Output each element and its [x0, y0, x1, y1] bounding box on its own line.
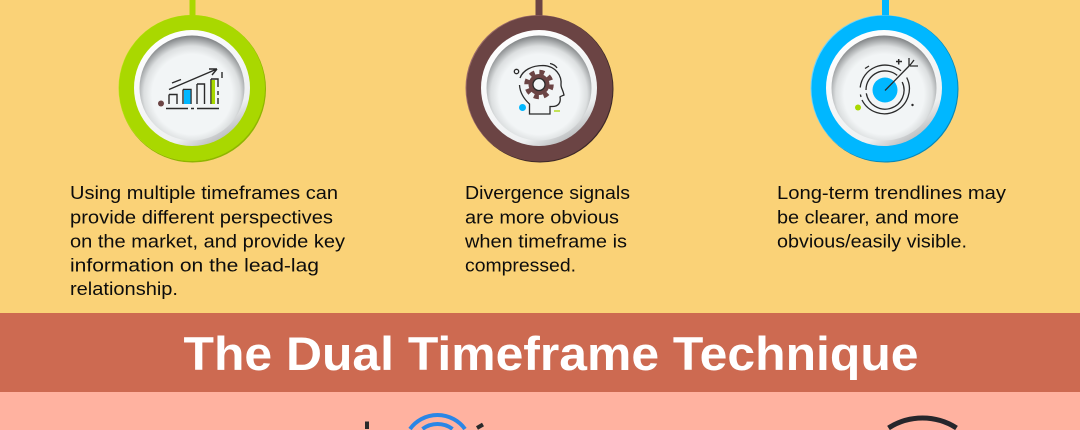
- text block: multiple timeframes: provide different perspectives: [70, 208, 333, 228]
- text block: divergence signals: Divergence signals: [465, 183, 630, 203]
- text block: divergence signals: when timeframe is: [464, 232, 627, 252]
- text block: divergence signals: are more obvious: [465, 208, 619, 228]
- text block: long-term trendlines: obvious/easily visible.: [777, 232, 967, 252]
- banner: section title: [0, 313, 1080, 392]
- icon: blue target partial: [367, 415, 483, 429]
- text block: multiple timeframes: relationship.: [70, 279, 178, 299]
- text block: long-term trendlines: [777, 183, 1006, 252]
- icon: head with gear: [514, 64, 564, 114]
- icon part: gear: [526, 72, 552, 97]
- icon: target with arrow: [855, 58, 918, 114]
- text block: divergence signals: compressed.: [465, 256, 576, 276]
- icon: dark circle partial: [888, 418, 956, 428]
- badge: brown head: [466, 0, 614, 162]
- badge: green chart: [118, 0, 266, 162]
- text block: long-term trendlines: Long-term trendlines may: [777, 183, 1006, 203]
- text block: multiple timeframes: Using multiple timeframes can: [70, 183, 338, 203]
- badge: blue target: [810, 0, 958, 162]
- heading: The Dual Timeframe Technique: The Dual Timeframe Technique: [184, 327, 918, 380]
- icon: rising bar chart: [158, 69, 222, 108]
- text block: multiple timeframes: [70, 183, 345, 299]
- background: salmon section: [0, 392, 1080, 430]
- text block: multiple timeframes: on the market, and provide key: [70, 232, 345, 252]
- text block: divergence signals: [464, 183, 630, 276]
- text block: long-term trendlines: be clearer, and more: [777, 208, 959, 228]
- text block: multiple timeframes: information on the lead-lag: [70, 256, 319, 276]
- background: yellow section: [0, 0, 1080, 313]
